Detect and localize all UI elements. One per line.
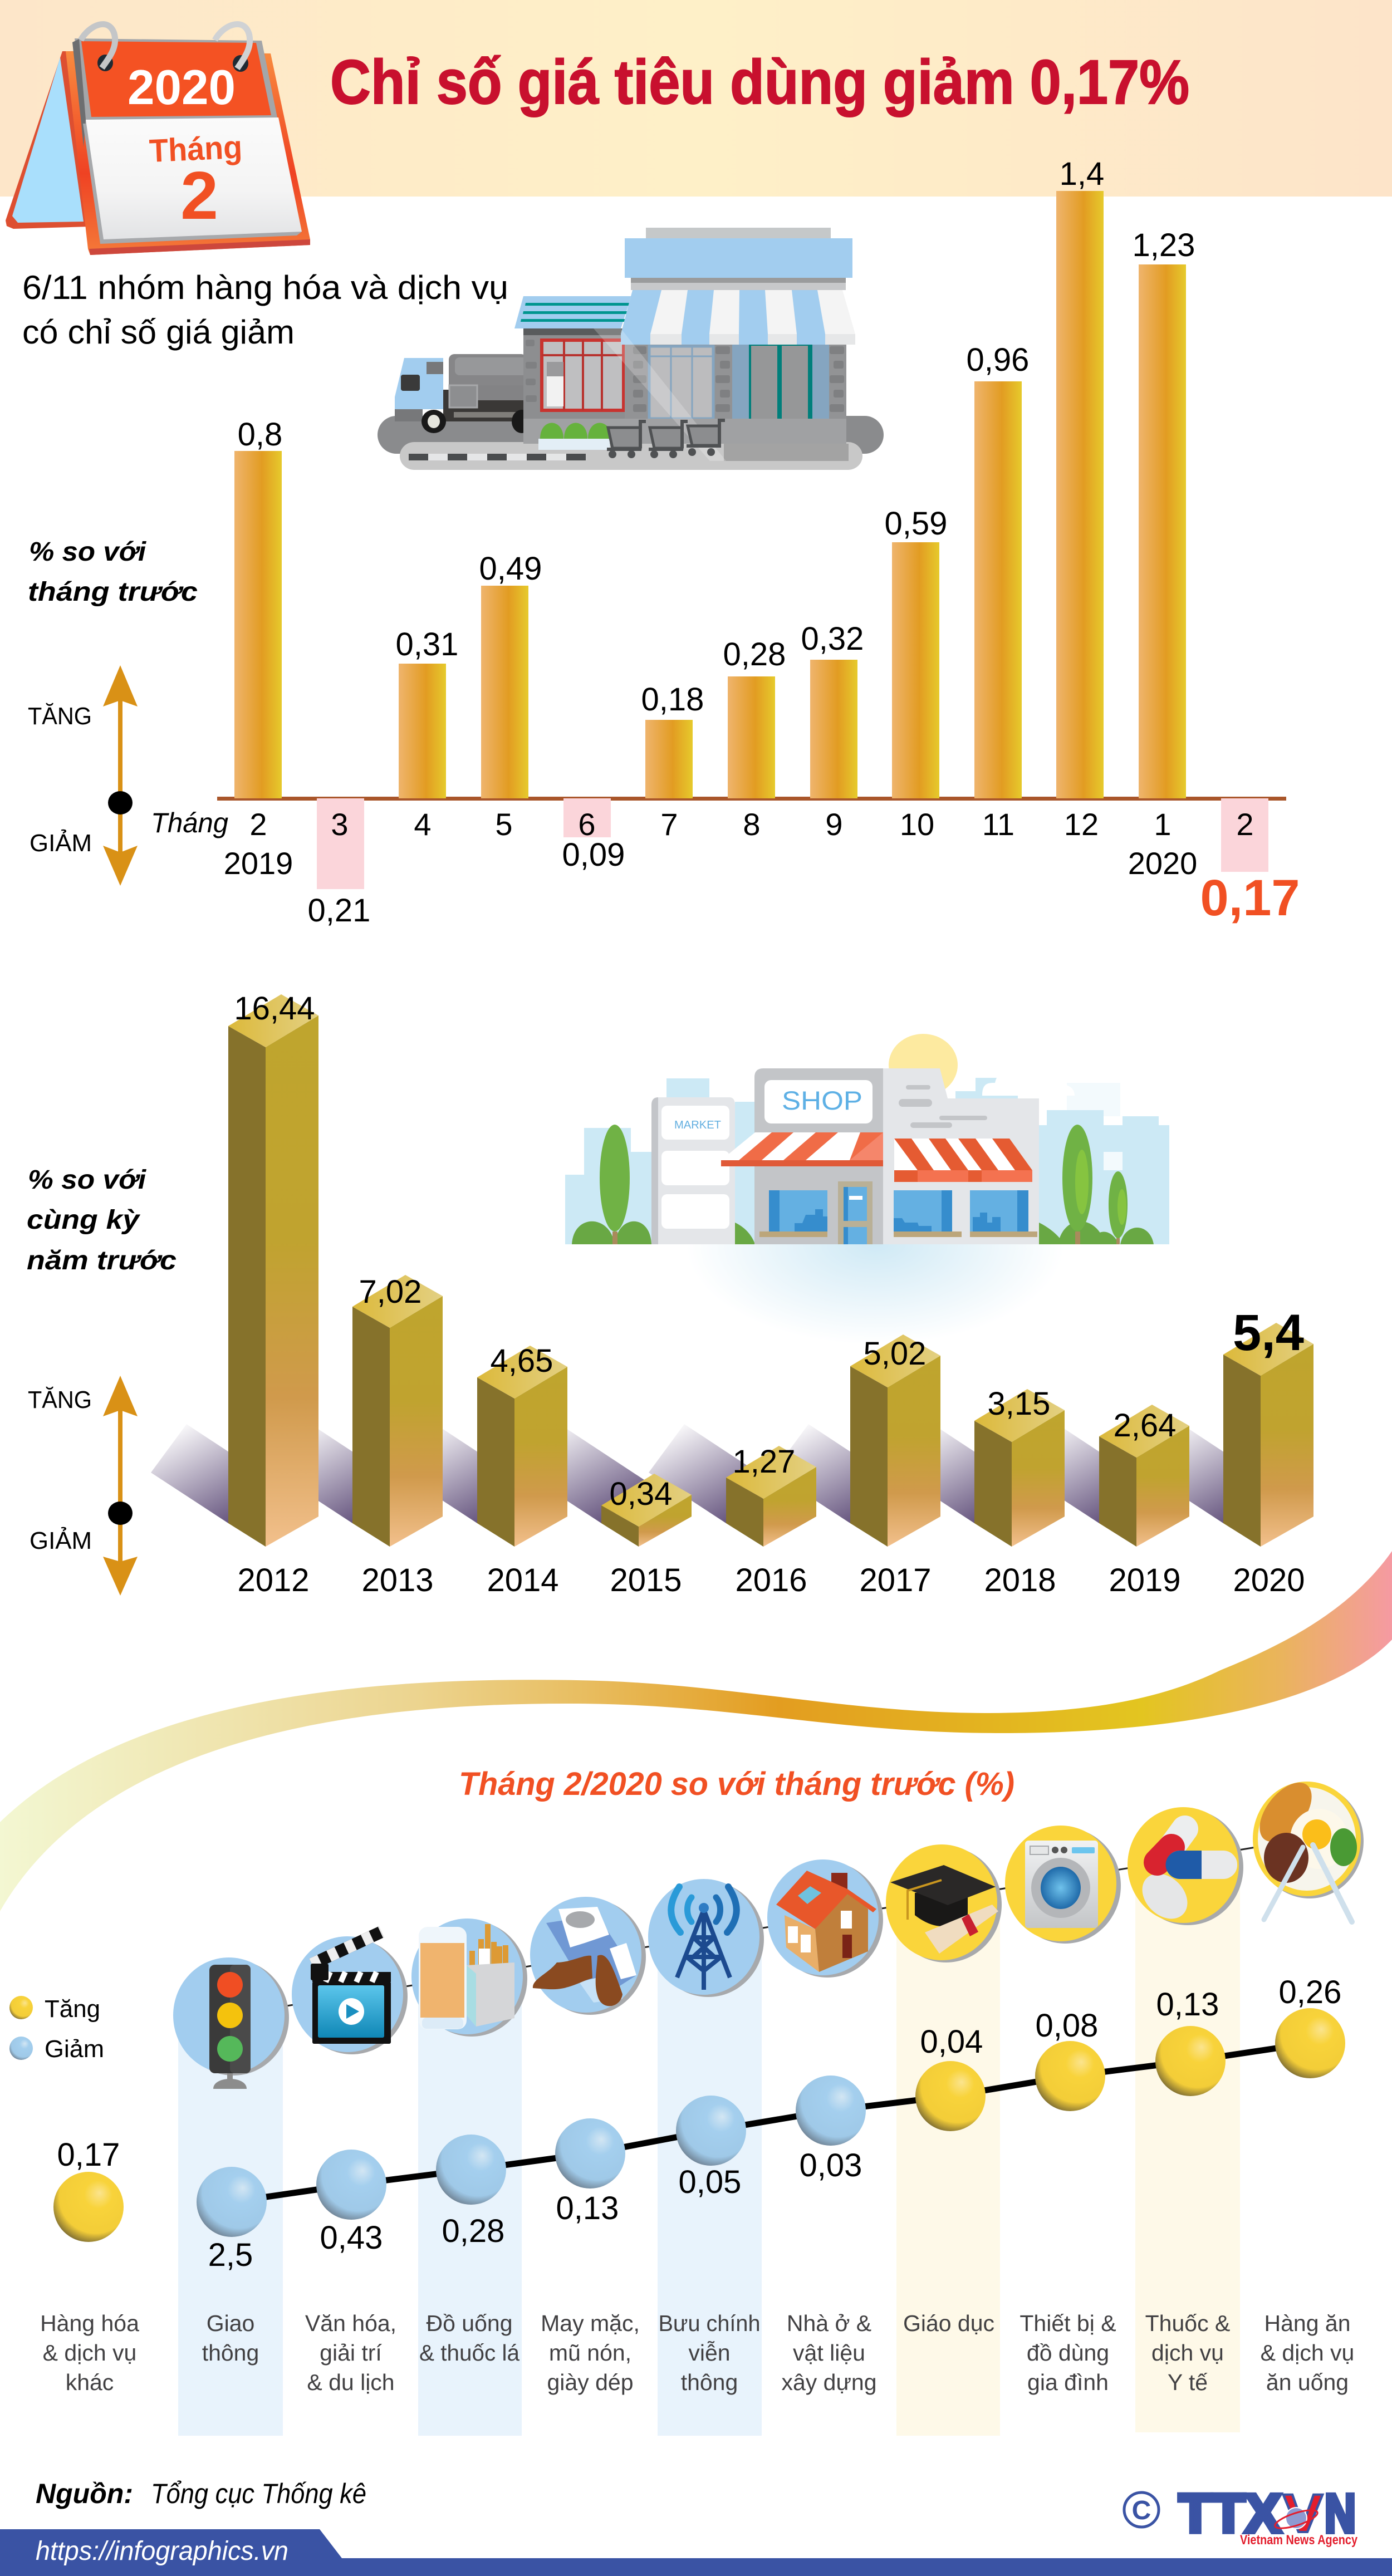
year labels: 2014 bbox=[487, 1562, 559, 1598]
month labels: 10 bbox=[900, 807, 934, 842]
section heading: Tháng 2/2020 so với tháng trước (%) bbox=[459, 1766, 1014, 1802]
month labels: 1 bbox=[1154, 807, 1172, 842]
icon: drink and cigarettes bbox=[411, 1918, 527, 2037]
category labels: ăn uống bbox=[1266, 2369, 1349, 2395]
month labels: 2019 bbox=[224, 846, 293, 881]
month labels: 4 bbox=[414, 807, 432, 842]
value labels: 0,17 bbox=[57, 2137, 120, 2173]
awning bbox=[621, 290, 855, 345]
value labels: 0,03 bbox=[800, 2147, 862, 2184]
subtitle bbox=[22, 269, 508, 351]
axis note: % so với tháng trước: tháng trước bbox=[28, 577, 198, 607]
value labels: 0,04 bbox=[920, 2024, 983, 2060]
value labels: 16,44 bbox=[234, 990, 315, 1027]
category labels: Hàng hóa bbox=[40, 2310, 139, 2336]
bar 2012 bbox=[228, 994, 318, 1547]
main shop bbox=[526, 228, 855, 450]
arrow: tăng giảm, chart 1: TĂNG bbox=[28, 703, 92, 730]
bars rising bbox=[234, 191, 1186, 798]
legend bbox=[9, 1995, 104, 2063]
year labels: 2019 bbox=[1109, 1562, 1181, 1598]
value labels: 3,15 bbox=[988, 1386, 1050, 1422]
category labels: & dịch vụ bbox=[1261, 2340, 1354, 2366]
category labels: giày dép bbox=[547, 2369, 634, 2395]
logo: TTXVN bbox=[1124, 2483, 1358, 2548]
value labels: 0,59 bbox=[885, 506, 947, 542]
category labels: Văn hóa, bbox=[305, 2310, 396, 2336]
axis baseline bbox=[217, 797, 1286, 801]
year labels: 2016 bbox=[735, 1562, 807, 1598]
category labels: Thiết bị & bbox=[1020, 2310, 1116, 2336]
cloud bbox=[982, 1066, 1075, 1096]
value labels: 4,65 bbox=[491, 1343, 553, 1379]
value labels: 0,43 bbox=[320, 2220, 383, 2256]
value labels: 0,32 bbox=[801, 621, 864, 657]
value labels: 2,64 bbox=[1114, 1407, 1176, 1444]
axis note: % so với cùng kỳ năm trước: năm trước bbox=[27, 1246, 177, 1275]
year labels: 2017 bbox=[859, 1562, 932, 1598]
icon: desk calendar bbox=[6, 24, 310, 255]
illustration: grocery store and truck bbox=[378, 228, 884, 470]
category labels: Thuốc & bbox=[1145, 2310, 1230, 2336]
logo: TTXVN: V bbox=[1283, 2483, 1323, 2544]
logo: TTXVN: TTX bbox=[1179, 2483, 1281, 2544]
value labels: 0,18 bbox=[641, 681, 704, 718]
legend: Giảm bbox=[45, 2035, 104, 2063]
thin line behind icons bbox=[229, 1839, 1307, 2015]
month labels: 2 bbox=[1236, 807, 1254, 842]
value labels: 0,8 bbox=[238, 416, 282, 453]
arrow: tăng giảm, chart 2 bbox=[28, 1376, 138, 1596]
ground bbox=[400, 442, 862, 470]
value labels: 0,96 bbox=[967, 342, 1029, 378]
source bbox=[36, 2478, 366, 2509]
bar 2015 bbox=[601, 1474, 692, 1547]
subtitle: 6/11 nhóm hàng hóa và dịch vụ bbox=[22, 269, 508, 306]
right building bbox=[883, 1068, 1039, 1244]
arrow: tăng giảm, chart 2: TĂNG bbox=[28, 1386, 92, 1414]
logo: TTXVN: N bbox=[1325, 2483, 1356, 2544]
category labels: khác bbox=[66, 2369, 114, 2395]
month labels: 11 bbox=[982, 807, 1014, 842]
icon: medicine pills bbox=[1128, 1807, 1243, 1928]
category labels: & thuốc lá bbox=[419, 2340, 519, 2366]
month labels: 7 bbox=[660, 807, 678, 842]
icon: graduation cap and diploma bbox=[886, 1844, 1002, 1962]
bar 2013 bbox=[352, 1275, 443, 1547]
value labels: 1,27 bbox=[733, 1444, 795, 1480]
stones bbox=[526, 340, 844, 412]
year labels bbox=[237, 1562, 1305, 1598]
arrow: tăng giảm, chart 1: GIẢM bbox=[30, 829, 92, 857]
value labels bbox=[57, 1974, 1341, 2273]
category labels: Giao bbox=[207, 2310, 254, 2336]
sun bbox=[889, 1034, 958, 1096]
category labels: xây dựng bbox=[781, 2369, 877, 2395]
bar 2019 bbox=[1099, 1405, 1189, 1547]
value labels: 1,23 bbox=[1133, 227, 1195, 263]
icon: house bbox=[767, 1859, 883, 1978]
value labels bbox=[234, 990, 1304, 1512]
decorative ribbon bbox=[0, 1551, 1392, 1911]
value labels: 0,09 bbox=[562, 837, 625, 873]
value labels: 0,34 bbox=[610, 1476, 672, 1512]
year labels: 2018 bbox=[984, 1562, 1056, 1598]
category labels: & du lịch bbox=[307, 2369, 395, 2395]
value labels: 0,49 bbox=[479, 551, 542, 587]
value labels: 7,02 bbox=[359, 1274, 421, 1310]
calendar month label: Tháng bbox=[149, 129, 243, 169]
footer bar: https://infographics.vn bbox=[36, 2536, 288, 2566]
category labels bbox=[40, 2310, 1354, 2395]
category labels: Hàng ăn bbox=[1264, 2310, 1351, 2336]
value labels: 2,5 bbox=[208, 2237, 253, 2273]
shopping carts bbox=[607, 420, 725, 458]
value labels: 0,31 bbox=[396, 626, 458, 663]
month labels: 2 bbox=[249, 807, 267, 842]
category labels: Đồ uống bbox=[426, 2310, 513, 2336]
value labels: 0,13 bbox=[556, 2190, 619, 2226]
skyline bbox=[565, 1078, 1169, 1244]
value labels bbox=[238, 156, 1195, 929]
center building bbox=[754, 1068, 883, 1244]
month labels bbox=[151, 807, 1254, 881]
arrow: tăng giảm, chart 2: GIẢM bbox=[30, 1527, 92, 1554]
illustration: city shop bbox=[565, 1034, 1169, 1345]
logo: TTXVN: C bbox=[1132, 2496, 1151, 2525]
value labels: 5,02 bbox=[864, 1336, 926, 1372]
left awning bbox=[721, 1132, 883, 1166]
category labels: đồ dùng bbox=[1027, 2340, 1109, 2366]
axis note: % so với cùng kỳ năm trước bbox=[27, 1165, 177, 1275]
category labels: May mặc, bbox=[541, 2310, 640, 2336]
year labels: 2015 bbox=[610, 1562, 682, 1598]
door bbox=[838, 1181, 873, 1244]
connector line bbox=[232, 2043, 1310, 2202]
category labels: thông bbox=[681, 2369, 738, 2395]
value labels: 0,13 bbox=[1156, 1986, 1219, 2023]
month labels: Tháng bbox=[151, 807, 228, 838]
calendar month number: 2 bbox=[180, 158, 218, 233]
footer bar bbox=[0, 2529, 1392, 2576]
bar 2018 bbox=[974, 1389, 1065, 1547]
value labels: 0,26 bbox=[1279, 1974, 1341, 2010]
category labels: giải trí bbox=[320, 2340, 382, 2366]
bar shadows bbox=[151, 1424, 1276, 1523]
icon: telecom tower bbox=[648, 1879, 764, 1997]
month labels: 12 bbox=[1064, 807, 1099, 842]
category labels: dịch vụ bbox=[1151, 2340, 1224, 2366]
icon: washing machine bbox=[1005, 1826, 1121, 1944]
line chart: balls bbox=[53, 1974, 1345, 2273]
month labels: 5 bbox=[495, 807, 513, 842]
source: Nguồn: bbox=[36, 2478, 133, 2509]
month labels: 6 bbox=[578, 807, 596, 842]
bar 2017 bbox=[850, 1334, 940, 1547]
value labels: 0,28 bbox=[723, 636, 786, 673]
category labels: Giáo dục bbox=[903, 2310, 994, 2336]
window left bbox=[769, 1190, 827, 1231]
truck bbox=[395, 354, 532, 433]
header band bbox=[0, 0, 1392, 197]
column highlights bbox=[178, 1865, 1240, 2436]
panel: 3D bar chart % so với cùng kỳ năm trước bbox=[151, 990, 1313, 1598]
category labels: thông bbox=[202, 2340, 259, 2366]
month labels: 3 bbox=[331, 807, 349, 842]
value labels: 0,21 bbox=[308, 892, 370, 929]
category labels: viễn bbox=[688, 2340, 731, 2366]
trees and bushes bbox=[572, 1125, 1154, 1244]
planter bbox=[538, 423, 611, 450]
title: Chỉ số giá tiêu dùng giảm 0,17% bbox=[330, 47, 1189, 117]
category labels: Y tế bbox=[1168, 2369, 1208, 2395]
market tower: MARKET bbox=[674, 1119, 721, 1131]
axis note: % so với tháng trước bbox=[28, 537, 198, 607]
axis note: % so với cùng kỳ năm trước: % so với bbox=[28, 1165, 147, 1195]
market tower bbox=[651, 1097, 735, 1244]
bar 2014 bbox=[477, 1346, 567, 1547]
left shop bbox=[514, 296, 631, 420]
value labels: 0,05 bbox=[679, 2164, 741, 2200]
source: Tổng cục Thống kê bbox=[151, 2478, 366, 2509]
icon: shirt and shoes bbox=[530, 1897, 646, 2015]
year labels: 2020 bbox=[1233, 1562, 1305, 1598]
bars falling bbox=[317, 798, 1268, 889]
category labels: Bưu chính bbox=[658, 2310, 761, 2336]
logo: TTXVN: Vietnam News Agency bbox=[1240, 2533, 1358, 2548]
axis note: % so với tháng trước: % so với bbox=[29, 537, 147, 567]
bar 2020 bbox=[1223, 1323, 1313, 1547]
highlighted value: 0,17 bbox=[1200, 870, 1300, 926]
arrow: tăng giảm, chart 1 bbox=[28, 665, 138, 886]
axis note: % so với cùng kỳ năm trước: cùng kỳ bbox=[27, 1205, 141, 1235]
value labels: 0,08 bbox=[1036, 2008, 1098, 2044]
year labels: 2012 bbox=[237, 1562, 310, 1598]
value labels: 1,4 bbox=[1060, 156, 1104, 192]
icon: food plate bbox=[1249, 1773, 1364, 1922]
subtitle: có chỉ số giá giảm bbox=[22, 313, 295, 351]
category labels: Nhà ở & bbox=[787, 2310, 871, 2336]
icon: film clapper bbox=[292, 1932, 408, 2054]
month labels: 2020 bbox=[1128, 846, 1197, 881]
bar 2016 bbox=[726, 1446, 816, 1547]
right awning bbox=[894, 1139, 1032, 1182]
legend: Tăng bbox=[45, 1995, 100, 2023]
category labels: & dịch vụ bbox=[43, 2340, 136, 2366]
month labels: 8 bbox=[743, 807, 761, 842]
bar chart: % so với tháng trước bbox=[151, 156, 1300, 929]
category labels: vật liệu bbox=[793, 2340, 865, 2366]
value labels: 0,28 bbox=[442, 2213, 504, 2249]
value labels: 5,4 bbox=[1233, 1304, 1304, 1361]
icon: traffic light bbox=[173, 1957, 289, 2089]
month labels: 9 bbox=[825, 807, 843, 842]
center building: SHOP bbox=[782, 1086, 862, 1115]
category labels: gia đình bbox=[1027, 2369, 1109, 2395]
calendar year: 2020 bbox=[128, 60, 236, 115]
category labels: mũ nón, bbox=[549, 2340, 631, 2366]
year labels: 2013 bbox=[361, 1562, 434, 1598]
